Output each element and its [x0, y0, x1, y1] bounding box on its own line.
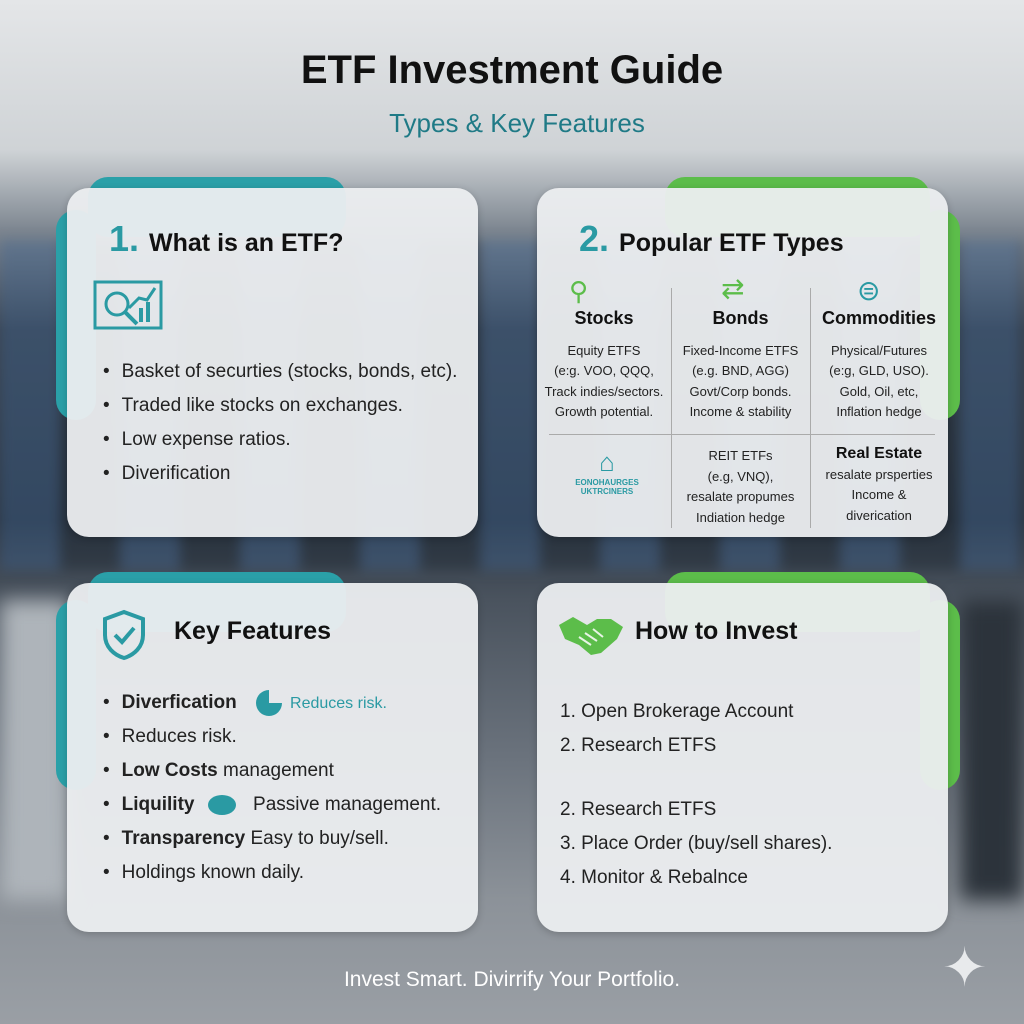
steps: 2. Research ETFS — [560, 799, 716, 820]
icon: magnifier chart — [94, 280, 162, 330]
column: real estate — [826, 445, 932, 522]
column: real estate: resalate prsperties — [826, 466, 932, 482]
column: REIT: resalate propumes — [687, 489, 794, 504]
column: REIT: REIT ETFs — [708, 448, 773, 463]
panel: popular ETF types: ⊜ — [857, 275, 880, 306]
steps — [560, 701, 832, 888]
panel: popular ETF types: ⇄ — [721, 273, 744, 304]
column: bonds: Income & stability — [690, 404, 791, 419]
bullets — [104, 361, 457, 484]
steps: 1. Open Brokerage Account — [560, 701, 793, 722]
icon: handshake — [559, 617, 623, 655]
steps: 3. Place Order (buy/sell shares). — [560, 833, 832, 854]
heading 2: 2. Popular ETF Types — [579, 218, 844, 259]
dividers — [671, 288, 672, 528]
icon: shield — [103, 610, 145, 660]
panel: how to invest — [537, 583, 948, 932]
icon: real estate: UKTRCINERS — [581, 487, 633, 496]
icon: sparkle: ✦ — [942, 938, 987, 998]
bullets: Transparency Easy to buy/sell. — [122, 828, 389, 849]
column: stocks: Track indies/sectors. — [545, 384, 663, 398]
column: real estate: diverication — [846, 508, 912, 522]
bullets: Liquility Passive management. — [122, 794, 441, 815]
column: stocks: Growth potential. — [555, 404, 653, 419]
background screens — [0, 240, 1024, 570]
column: bonds — [683, 308, 798, 419]
bullets: Basket of securties (stocks, bonds, etc). — [122, 361, 457, 382]
footer tagline: Invest Smart. Divirrify Your Portfolio. — [344, 968, 680, 991]
subtitle: Types & Key Features — [389, 108, 645, 138]
panel: popular ETF types — [537, 188, 948, 537]
bullets: Diverfication Reduces risk. — [122, 692, 387, 713]
column: commodities: Commodities — [822, 308, 936, 328]
column: REIT — [687, 448, 794, 524]
column: REIT: (e.g, VNQ), — [708, 468, 773, 484]
column: commodities — [822, 308, 936, 419]
column: stocks: Equity ETFS — [568, 342, 640, 358]
column: commodities: Inflation hedge — [836, 404, 922, 419]
column: commodities: Physical/Futures — [831, 342, 927, 358]
bullets: Reduces risk. — [122, 726, 237, 747]
heading: How to Invest — [635, 617, 798, 645]
column: bonds: (e.g. BND, AGG) — [692, 363, 789, 378]
column: REIT: Indiation hedge — [696, 510, 785, 524]
icon: real estate: EONOHAURGES — [575, 478, 639, 487]
icon: real estate: ⌂ — [599, 447, 615, 477]
column: stocks — [544, 308, 663, 419]
icons: ⚲ — [569, 276, 588, 306]
steps: 2. Research ETFS — [560, 735, 716, 756]
heading: Key Features — [174, 617, 331, 645]
icon: real estate — [575, 447, 639, 496]
bullets: Low expense ratios. — [122, 429, 291, 450]
heading 1: 1. What is an ETF? — [109, 218, 343, 259]
bullets: Diverification — [122, 463, 230, 484]
accent tabs — [88, 177, 346, 237]
bullets: Traded like stocks on exchanges. — [122, 395, 403, 416]
column: stocks: (e:g. VOO, QQQ, — [554, 363, 654, 378]
steps: 4. Monitor & Rebalnce — [560, 867, 748, 888]
panel: key features — [67, 583, 478, 932]
column: real estate: Income & — [852, 487, 906, 502]
column: commodities: (e:g, GLD, USO). — [829, 363, 929, 378]
column: stocks: Stocks — [574, 308, 634, 328]
bullets — [104, 690, 441, 883]
bullets: Low Costs management — [122, 760, 334, 781]
title: ETF Investment Guide — [301, 48, 723, 92]
bullets: Holdings known daily. — [122, 862, 304, 883]
column: bonds: Bonds — [712, 308, 768, 328]
column: bonds: Govt/Corp bonds. — [690, 384, 791, 398]
column: bonds: Fixed-Income ETFS — [683, 342, 798, 358]
column: commodities: Gold, Oil, etc, — [840, 384, 918, 398]
column: real estate: Real Estate — [836, 445, 922, 462]
panel: what is an ETF — [67, 188, 478, 537]
